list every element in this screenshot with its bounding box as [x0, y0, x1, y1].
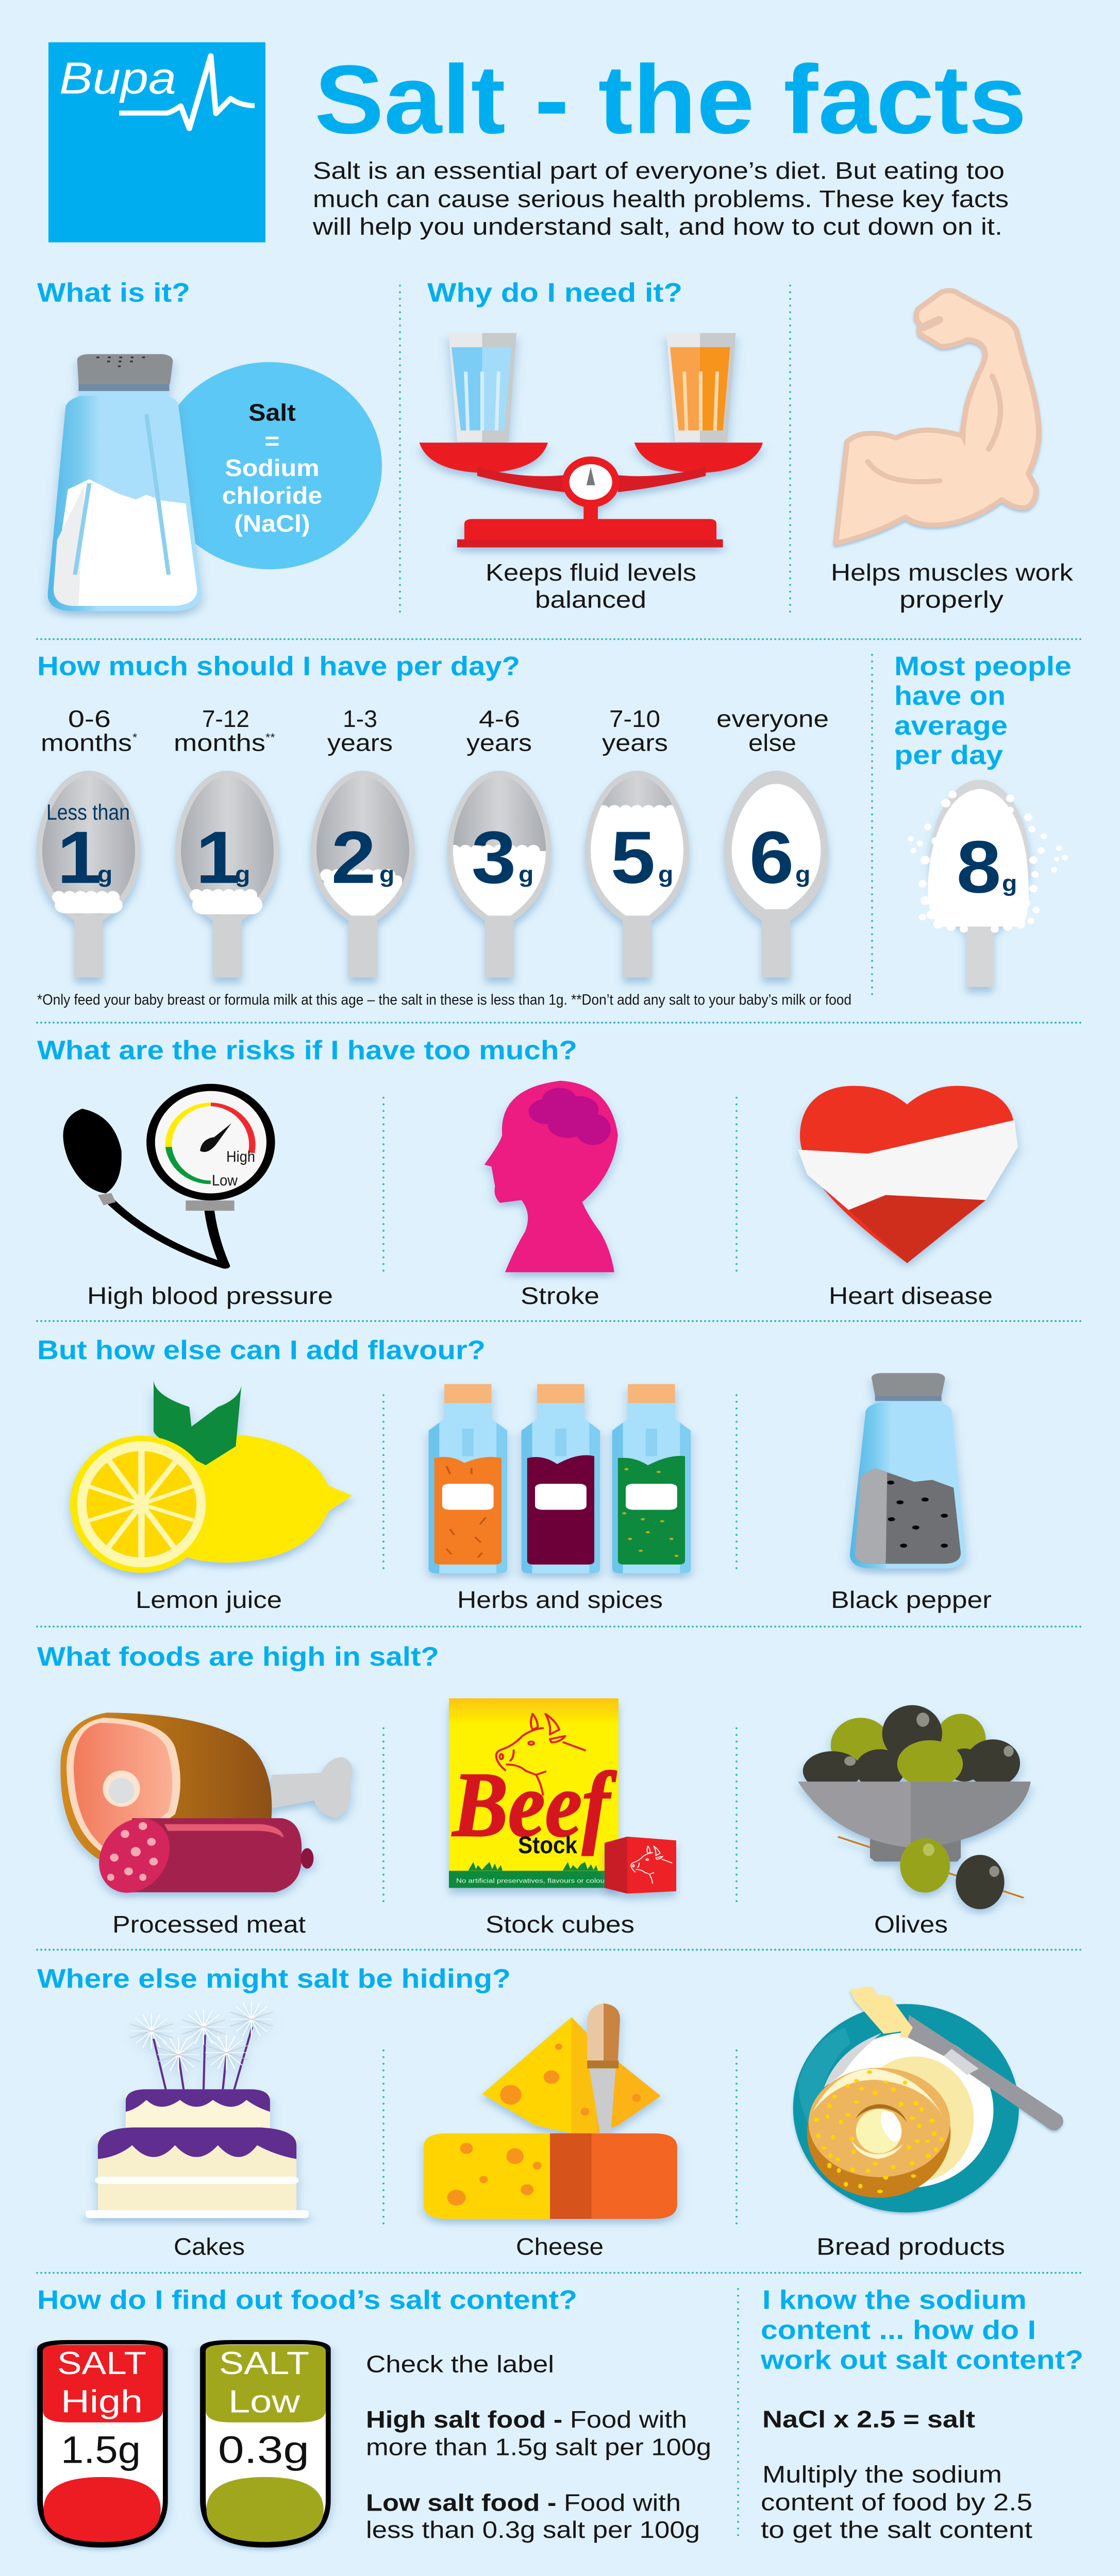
Bupa logo — [48, 42, 265, 242]
intro text: will help you understand salt, and how to cut down on it. — [312, 213, 1002, 240]
heading: Why do I need it?: Why do I need it? — [427, 278, 682, 308]
labels: hidden salt foods — [174, 2233, 1005, 2260]
spoon: 3g: 3 — [472, 816, 516, 899]
explanation text: to get the salt content — [761, 2517, 1032, 2544]
age labels: 0-6 — [68, 706, 111, 733]
spoon: 1g: 1 — [196, 816, 240, 899]
spoon: 6g: g — [795, 861, 810, 887]
food label: salt high — [37, 2340, 168, 2548]
age labels: 7-12 — [202, 706, 249, 733]
label: helps muscles work properly: Helps muscles work — [831, 560, 1074, 586]
explanation text — [761, 2461, 1032, 2544]
icon: bagel on plate with knife — [793, 1986, 1063, 2212]
heading: Most people have on average per day: have on — [894, 681, 1006, 710]
spoon: 5g — [585, 771, 689, 977]
icon: flexed arm — [836, 291, 1039, 543]
icon: blood pressure monitor — [63, 1084, 275, 1266]
scale body — [420, 443, 763, 548]
icon: bandaged heart — [798, 1086, 1018, 1263]
age labels: 4-6 — [479, 706, 520, 733]
icon: herb and spice bottles — [429, 1384, 691, 1573]
labels: risks: High blood pressure — [87, 1283, 333, 1309]
heading: flavour: But how else can I add flavour? — [37, 1335, 486, 1365]
circle: salt definition: (NaCl) — [234, 511, 310, 537]
spoon: 8g overflowing with salt: g — [1002, 870, 1017, 896]
labels: high salt foods: Stock cubes — [486, 1911, 634, 1938]
icon: lemon — [70, 1379, 352, 1573]
spoon: 6g: 6 — [749, 816, 794, 899]
explanation text: content of food by 2.5 — [761, 2489, 1032, 2516]
heading: salt content: How do I find out food’s salt content? — [37, 2285, 577, 2315]
spoon: 5g: g — [658, 861, 673, 887]
spoon: 3g: g — [519, 861, 533, 887]
icon: head with stroke — [484, 1081, 618, 1272]
age labels — [41, 706, 829, 756]
labels: hidden salt foods: Cheese — [516, 2233, 604, 2260]
labels: high salt foods: Olives — [874, 1911, 948, 1938]
heading: hiding salt: Where else might salt be hiding? — [37, 1964, 511, 1994]
heading: risks: What are the risks if I have too much? — [37, 1036, 577, 1065]
age labels: years — [602, 730, 668, 756]
icon: beef stock box and cube: No artificial preservatives, flavours or colou — [456, 1877, 605, 1884]
label: keeps fluid levels balanced: balanced — [535, 586, 646, 613]
spoon: 3g — [447, 771, 551, 977]
text: check the label: Check the label — [366, 2351, 554, 2378]
text: check the label: more than 1.5g salt per 100g — [366, 2434, 711, 2461]
age labels: 7-10 — [609, 706, 660, 733]
text: check the label: less than 0.3g salt per 100g — [366, 2517, 700, 2544]
circle: salt definition — [157, 362, 382, 569]
age labels: ** — [265, 731, 275, 744]
water glass — [448, 333, 516, 442]
label: keeps fluid levels balanced: Keeps fluid levels — [486, 560, 696, 586]
icon: salt shaker — [48, 354, 202, 611]
labels: high salt foods: Processed meat — [112, 1911, 306, 1938]
spoon: less than 1g: 1 — [57, 816, 102, 899]
orange juice glass — [666, 333, 735, 442]
age labels: 1-3 — [343, 706, 377, 733]
heading: foods high in salt: What foods are high in salt? — [37, 1642, 439, 1671]
heading: Most people have on average per day: per day — [894, 740, 1003, 770]
spoon: 1g — [175, 771, 279, 977]
purple spice bottle — [522, 1384, 600, 1573]
labels: risks: Stroke — [521, 1283, 599, 1309]
circle: salt definition: = — [264, 428, 280, 454]
food label: salt low — [200, 2340, 331, 2548]
labels: risks: Heart disease — [829, 1283, 993, 1309]
spoon: 8g overflowing with salt — [908, 780, 1068, 987]
labels: high salt foods — [112, 1911, 948, 1938]
heading: sodium to salt — [760, 2285, 1083, 2375]
intro text: Salt is an essential part of everyone’s diet. But eating too — [313, 158, 1005, 184]
food label: salt high: High — [61, 2384, 143, 2419]
intro text — [312, 158, 1009, 240]
Bupa logo: Bupa — [59, 53, 176, 104]
labels: flavour: Lemon juice — [136, 1587, 282, 1614]
icon: beef stock box and cube: Beef — [452, 1753, 617, 1856]
icon: balance scales with two glasses — [420, 333, 763, 548]
heading: sodium to salt: I know the sodium — [762, 2285, 1027, 2315]
icon: beef stock box and cube — [449, 1698, 676, 1894]
food label: salt low: SALT — [219, 2345, 309, 2381]
age labels: else — [748, 730, 796, 756]
age labels: * — [132, 731, 137, 744]
heading: Most people have on average per day: Most people — [894, 652, 1072, 681]
icon: pepper shaker — [850, 1373, 966, 1568]
age labels: everyone — [716, 706, 829, 733]
labels: flavour: Herbs and spices — [457, 1587, 663, 1614]
heading: Most people have on average per day: average — [894, 711, 1008, 740]
labels: flavour: Black pepper — [831, 1587, 992, 1614]
spoon: 2g: 2 — [331, 816, 376, 899]
age labels: months — [174, 730, 265, 756]
spoon: less than 1g — [37, 771, 141, 977]
icon: cake with sparklers — [86, 2002, 309, 2218]
labels: flavour — [136, 1587, 992, 1614]
food label: salt low: Low — [228, 2384, 300, 2419]
age labels: years — [327, 730, 393, 756]
spoon: less than 1g: Less than — [46, 801, 130, 825]
icon: ham and salami — [60, 1713, 353, 1895]
spoon: 2g — [311, 771, 415, 977]
labels: hidden salt foods: Cakes — [174, 2233, 245, 2260]
spoon: less than 1g: g — [97, 861, 112, 887]
spoon: 1g: g — [235, 861, 250, 887]
intro text: much can cause serious health problems. These key facts — [313, 186, 1009, 213]
food label: salt low: 0.3g — [218, 2429, 309, 2471]
explanation text: Multiply the sodium — [762, 2461, 1002, 2488]
age labels: years — [466, 730, 532, 756]
label: keeps fluid levels balanced — [486, 560, 696, 613]
label: helps muscles work properly — [831, 560, 1074, 613]
spoon: 5g: 5 — [611, 816, 655, 899]
title: Salt - the facts — [314, 45, 1027, 154]
orange spice bottle — [429, 1384, 507, 1573]
age labels: months — [41, 730, 132, 756]
food label: salt high: SALT — [57, 2345, 146, 2381]
label: helps muscles work properly: properly — [899, 586, 1004, 613]
food label: salt high: 1.5g — [61, 2429, 141, 2471]
circle: salt definition: Salt — [248, 399, 296, 426]
spoon: 6g — [724, 771, 828, 977]
heading: sodium to salt: content ... how do I — [761, 2315, 1036, 2345]
circle: salt definition: chloride — [222, 482, 322, 509]
labels: hidden salt foods: Bread products — [816, 2233, 1005, 2260]
text: check the label: Low salt food - Food with — [366, 2489, 681, 2516]
icon: bowl of olives — [798, 1705, 1031, 1909]
circle: salt definition: Sodium — [225, 455, 320, 482]
text: check the label: High salt food - Food with — [366, 2406, 687, 2433]
icon: blood pressure monitor: Low — [212, 1172, 238, 1189]
formula: NaCl x 2.5 = salt — [762, 2406, 975, 2433]
heading: sodium to salt: work out salt content? — [760, 2345, 1083, 2375]
spoon: 8g overflowing with salt: 8 — [957, 825, 1001, 908]
icon: beef stock box and cube: Stock — [518, 1832, 577, 1859]
spoon: 2g: g — [379, 861, 394, 887]
green herb bottle — [612, 1384, 691, 1573]
icon: blood pressure monitor: High — [226, 1148, 255, 1165]
icon: cheese with knife — [424, 2004, 677, 2219]
heading: How much should I have per day?: How much should I have per day? — [37, 652, 520, 681]
text: check the label — [366, 2351, 711, 2544]
labels: risks — [87, 1283, 993, 1309]
heading: Most people have on average per day — [894, 652, 1072, 770]
heading: What is it?: What is it? — [37, 278, 190, 308]
footnote: *Only feed your baby breast or formula milk at this age – the salt in these is less than 1g. **Don’t add any salt to your baby’s milk or food — [37, 992, 851, 1008]
